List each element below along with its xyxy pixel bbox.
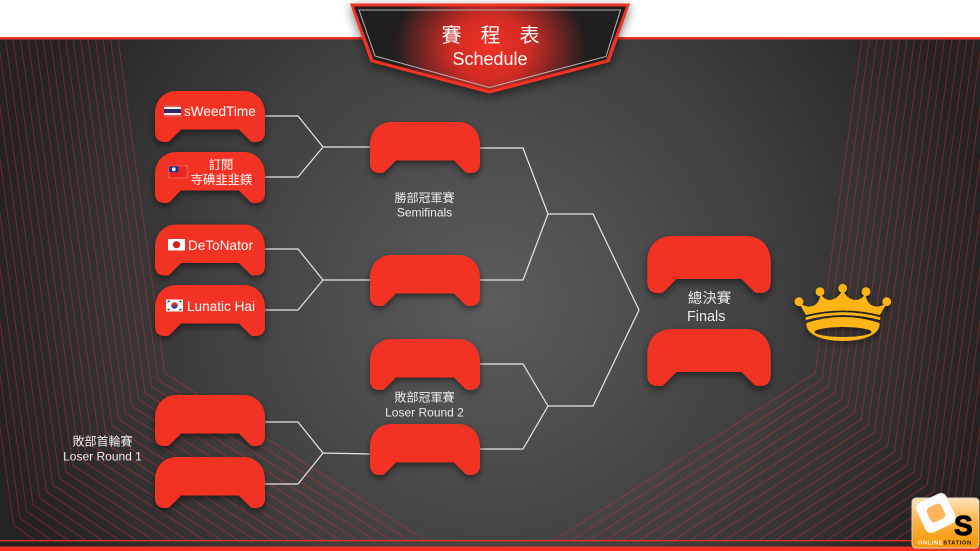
label: semifinals: 勝部冠軍賽	[394, 190, 455, 205]
flag: Japan	[168, 239, 185, 250]
top white strip	[0, 0, 980, 37]
label: semifinals	[394, 190, 455, 220]
empty slot: semifinal top	[370, 122, 480, 173]
flag: Thailand	[164, 105, 181, 117]
title: English: Schedule	[452, 49, 528, 69]
label: loser round 1	[63, 434, 142, 464]
logo: Online Station	[912, 491, 979, 548]
logo white tile	[914, 491, 958, 535]
flag: Taiwan	[169, 166, 187, 178]
flag: South Korea	[166, 300, 183, 312]
empty slot: final bottom	[647, 329, 771, 386]
label: loser round 1: 敗部首輪賽	[72, 434, 133, 448]
title banner	[350, 4, 630, 94]
empty slot: final top	[647, 236, 771, 293]
label: finals: 總決賽	[688, 290, 731, 307]
top red rule	[0, 37, 980, 40]
label: loser round 2: 敗部冠軍賽	[394, 390, 455, 404]
title: Chinese: 賽程表	[442, 24, 558, 47]
team name: 訂閱	[209, 157, 233, 172]
bracket connector lines	[265, 116, 639, 484]
bottom thin red rule	[0, 540, 980, 541]
empty slot: loser round 1 bottom	[155, 457, 265, 508]
empty slot: loser round 1 top	[155, 395, 265, 446]
empty slot: semifinal bottom	[370, 255, 480, 306]
label: loser round 2: Loser Round 2	[385, 406, 464, 420]
team slot: sWeedTime	[155, 91, 265, 142]
logo wordmark: ONLINESTATION	[918, 540, 971, 546]
empty slot: loser round 2 top	[370, 339, 480, 390]
team name: DeToNator	[188, 238, 253, 253]
team name line 2: 寺碘韭韭鎂	[191, 173, 252, 187]
team name: sWeedTime	[184, 104, 256, 119]
empty slot: loser round 2 bottom	[370, 424, 480, 475]
bottom thick red rule	[0, 546, 980, 551]
label: loser round 2	[385, 390, 464, 420]
label: finals	[687, 290, 731, 325]
label: finals: Finals	[687, 309, 725, 325]
team slot: DeToNator	[155, 224, 265, 276]
logo letter S: S	[954, 510, 973, 541]
team slot: Lunatic Hai	[155, 285, 265, 336]
team name: Lunatic Hai	[187, 299, 255, 314]
icon: crown	[795, 284, 891, 341]
red line pattern: left	[0, 39, 425, 540]
label: semifinals: Semifinals	[397, 206, 452, 220]
logo orange square	[925, 502, 947, 524]
team slot: 訂閱	[155, 152, 265, 203]
red line pattern: right	[555, 39, 980, 540]
label: loser round 1: Loser Round 1	[63, 450, 142, 464]
